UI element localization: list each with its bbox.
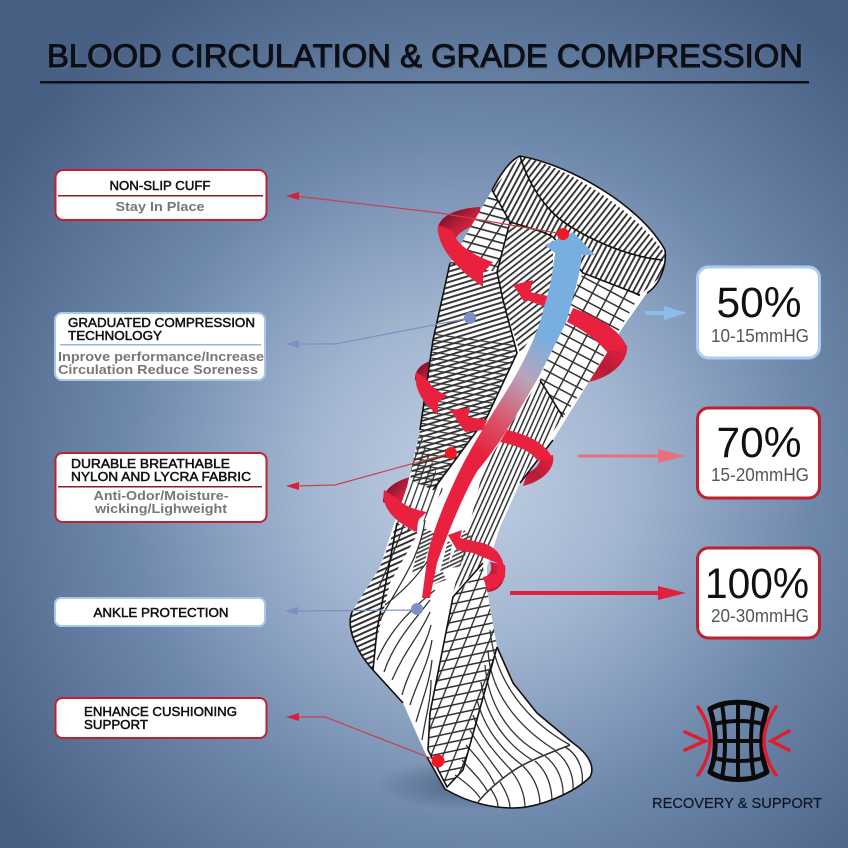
panel: 70 percent: 15-20mmHG [711, 465, 809, 485]
panel: graduated compression [55, 313, 265, 380]
non-slip marker [286, 192, 569, 240]
panel seams [373, 156, 663, 787]
panel: graduated compression: GRADUATED COMPRESSION [68, 315, 255, 330]
panel: durable fabric [56, 453, 266, 522]
panel: enhance cushioning [56, 698, 266, 738]
arrow: 100 percent [510, 586, 686, 600]
sock outline [350, 156, 665, 808]
front ribbons [383, 225, 627, 590]
fabric marker [286, 447, 457, 490]
panel: 100 percent: 20-30mmHG [711, 606, 809, 626]
callout lines and markers [285, 192, 569, 768]
back ribbons behind the sock [383, 207, 627, 592]
panel: 100 percent [698, 548, 820, 638]
panel: enhance cushioning: SUPPORT [84, 717, 148, 732]
panel: ankle protection [55, 598, 265, 626]
compression sock illustration [350, 156, 668, 808]
panel: 70 percent [698, 408, 820, 498]
panel: enhance cushioning: ENHANCE CUSHIONING [84, 704, 237, 719]
panel: 100 percent: 100% [705, 560, 809, 608]
panel: non-slip cuff: NON-SLIP CUFF [110, 179, 211, 193]
panel: durable fabric: NYLON AND LYCRA FABRIC [71, 470, 251, 484]
recovery label: RECOVERY & SUPPORT [652, 795, 822, 812]
ankle contour lines [377, 505, 440, 740]
toe seam and lines [478, 745, 582, 808]
sock base [350, 156, 665, 808]
panel: durable fabric: Anti-Odor/Moisture- [94, 489, 228, 503]
graduated marker [286, 312, 476, 348]
panel: ankle protection: ANKLE PROTECTION [94, 605, 228, 620]
panel: 50 percent: 50% [716, 279, 802, 327]
ankle marker [285, 603, 423, 615]
panel: non-slip cuff: Stay In Place [116, 199, 204, 214]
diagonal ankle patches [412, 528, 473, 585]
arrow: 50 percent [645, 306, 687, 320]
panel: graduated compression: Circulation Reduce Soreness [58, 362, 258, 377]
knit panels [350, 156, 668, 808]
panel: durable fabric: DURABLE BREATHABLE [71, 457, 230, 471]
arrow: 70 percent [578, 449, 685, 463]
panel: graduated compression: TECHNOLOGY [68, 328, 162, 343]
panel: non-slip cuff [56, 170, 266, 220]
title: BLOOD CIRCULATION & GRADE COMPRESSION [47, 38, 803, 74]
icon: recovery and support [685, 701, 789, 781]
title: BLOOD CIRCULATION & GRADE COMPRESSION [49, 40, 805, 76]
blood flow arrow [422, 232, 595, 598]
panel: 50 percent [698, 267, 820, 358]
foot shadow [375, 759, 565, 811]
panel: durable fabric: wicking/Lighweight [94, 502, 228, 516]
panel: 50 percent: 10-15mmHG [711, 326, 809, 346]
cushioning marker [286, 713, 444, 768]
panel: graduated compression: Inprove performance/Increase [58, 349, 264, 364]
heel lines [455, 630, 570, 798]
panel: 70 percent: 70% [716, 419, 802, 467]
